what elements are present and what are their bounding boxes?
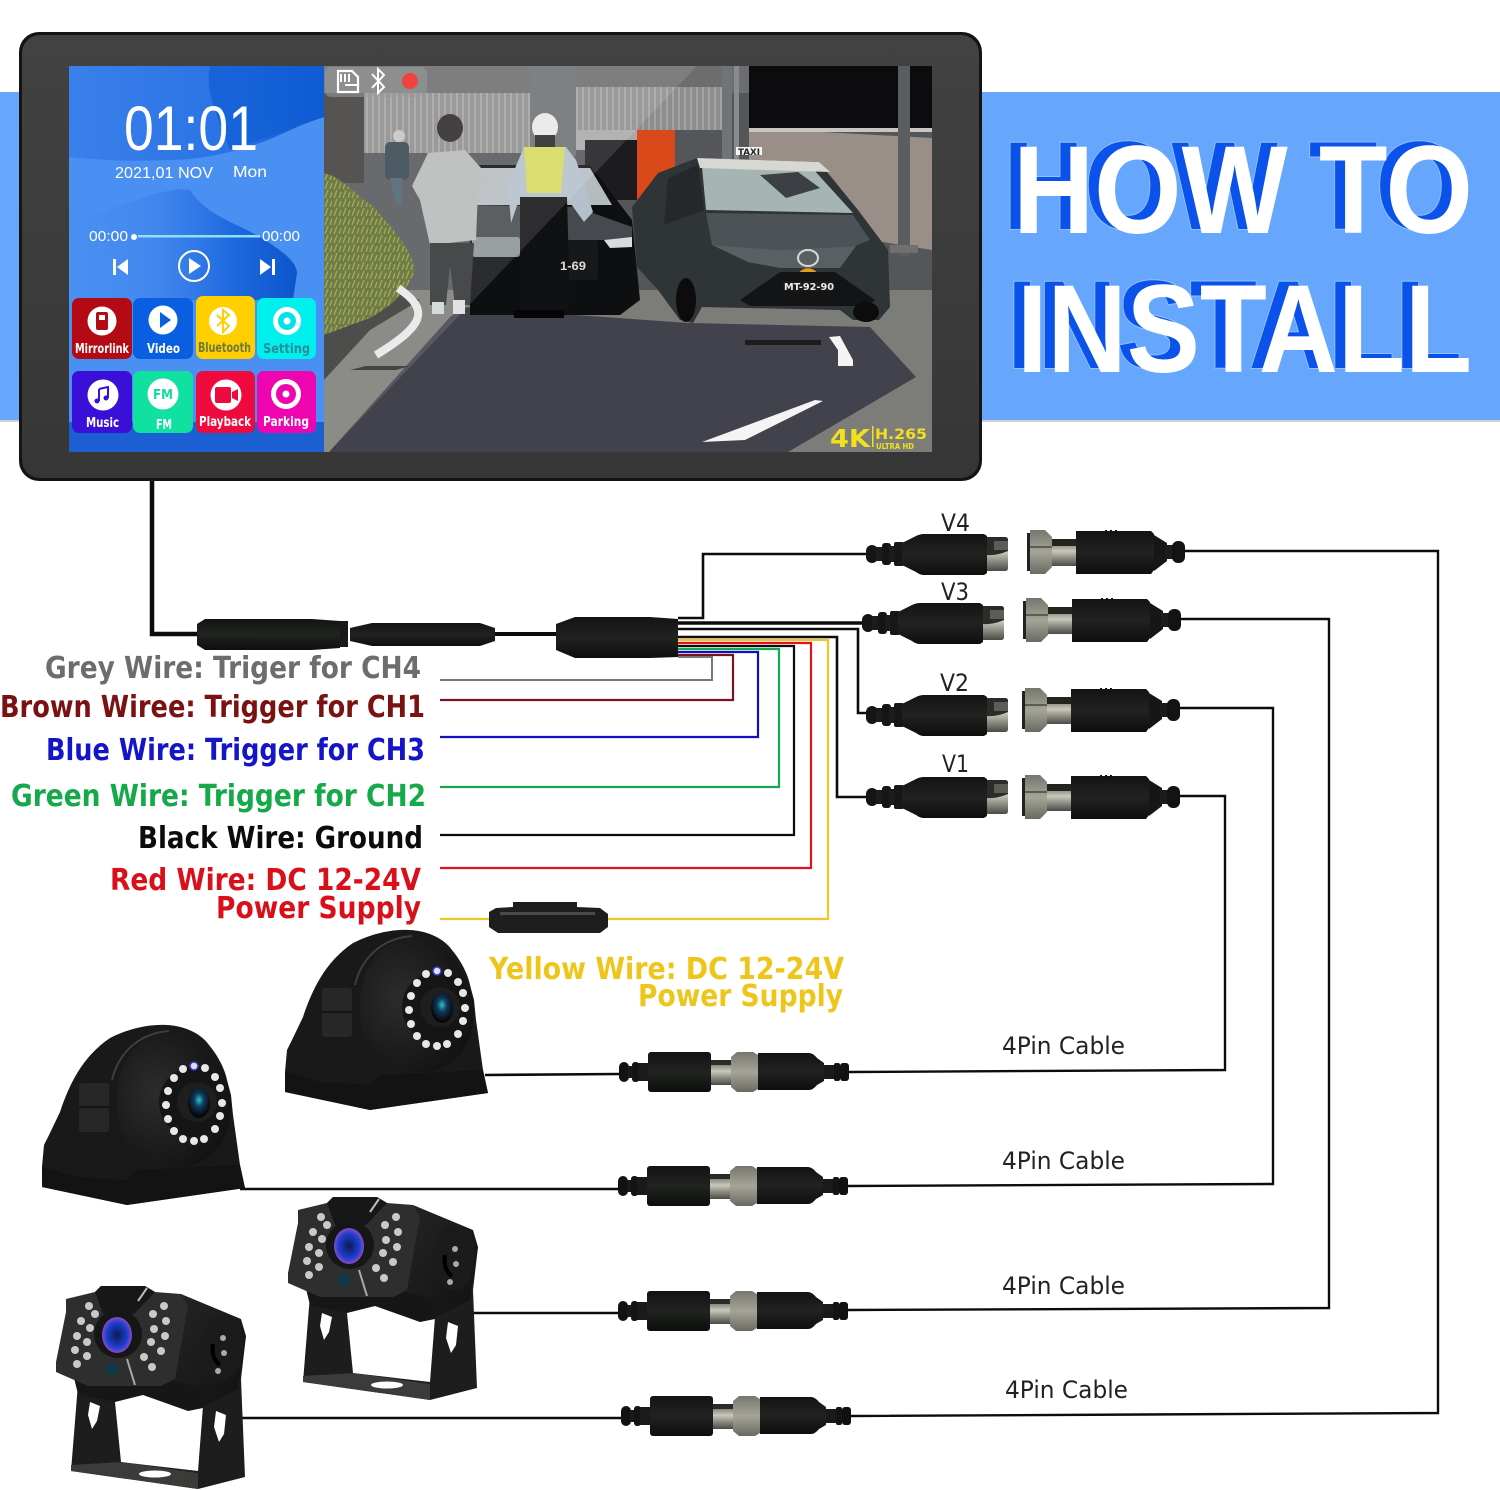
wire label: red: Power Supply xyxy=(216,891,421,926)
wire label: red: Red Wire: DC 12-24V xyxy=(110,863,422,898)
cable label 2: 4Pin Cable xyxy=(1002,1147,1125,1175)
app tile: Playback: Playback xyxy=(199,415,251,430)
media player controls: 00:00 xyxy=(262,228,300,245)
cable label 3: 4Pin Cable xyxy=(1002,1272,1125,1300)
app tile: Music: Music xyxy=(86,416,119,431)
cable label 4: 4Pin Cable xyxy=(1005,1376,1128,1404)
date: Mon xyxy=(233,164,267,181)
wire label: yellow xyxy=(488,952,845,1014)
app tile: Mirrorlink xyxy=(72,298,132,359)
wire label: yellow: Power Supply xyxy=(638,979,843,1014)
app tile: FM: FM xyxy=(156,418,172,433)
date: 2021,01 NOV xyxy=(115,165,214,182)
blue band xyxy=(0,92,1500,422)
connector pair V1 xyxy=(866,775,1180,819)
camera lead 2 xyxy=(240,1188,620,1190)
return wire V4 xyxy=(850,551,1438,1416)
date xyxy=(115,164,267,182)
left UI panel xyxy=(69,66,324,452)
app tile: Bluetooth: Bluetooth xyxy=(198,341,251,356)
app tile: Video xyxy=(133,298,193,359)
camera photo on screen xyxy=(324,66,932,452)
inline connector 3 xyxy=(618,1291,848,1331)
inline connector 4 xyxy=(621,1396,851,1436)
label V4: V4 xyxy=(941,509,970,537)
brown wire xyxy=(440,655,733,700)
camera photo on screen: MT-92-90 xyxy=(784,282,834,293)
4K H.265 badge: ULTRA HD xyxy=(876,442,914,451)
blue wire xyxy=(440,652,758,737)
box camera 2 xyxy=(56,1286,246,1489)
return wire V2 xyxy=(848,708,1273,1186)
camera lead 3 xyxy=(472,1312,620,1314)
red wire xyxy=(440,643,811,868)
4K H.265 badge: H.265 xyxy=(875,427,927,443)
dome camera 2 xyxy=(42,1025,245,1205)
app tile: Bluetooth xyxy=(196,296,255,359)
app tile: Parking: Parking xyxy=(263,415,309,430)
app tile: Music xyxy=(72,371,132,433)
grey wire xyxy=(440,657,712,680)
app tile: FM xyxy=(133,371,193,433)
title: how to install: HOW TO xyxy=(1003,117,1463,256)
wire label: green: Green Wire: Trigger for CH2 xyxy=(11,779,426,814)
main harness cable xyxy=(197,617,678,658)
title: how to install xyxy=(1003,117,1473,399)
app tile: Mirrorlink: Mirrorlink xyxy=(75,342,129,357)
app tile: FM: FM xyxy=(153,388,173,403)
wire label: yellow: Yellow Wire: DC 12-24V xyxy=(488,952,845,987)
4K H.265 badge xyxy=(830,424,927,453)
video wire V4 xyxy=(678,554,868,618)
black wire xyxy=(440,646,794,835)
4K H.265 badge: 4K xyxy=(830,424,872,453)
label V2: V2 xyxy=(940,669,969,697)
video wire V2 xyxy=(678,629,868,713)
return wire V1 xyxy=(848,796,1225,1072)
wire label: black: Black Wire: Ground xyxy=(138,821,423,856)
connector pair V2 xyxy=(866,688,1180,736)
monitor xyxy=(19,32,982,481)
camera lead 1 xyxy=(485,1074,620,1075)
inline connector 1 xyxy=(619,1052,849,1092)
wire label: blue: Blue Wire: Trigger for CH3 xyxy=(46,733,425,768)
camera photo on screen: 1-69 xyxy=(560,259,586,273)
wire label: grey: Grey Wire: Triger for CH4 xyxy=(45,651,421,686)
camera photo on screen: TAXI xyxy=(738,148,760,158)
connector pair V3 xyxy=(862,598,1181,644)
app tile: Parking xyxy=(257,371,316,433)
status bar icons xyxy=(325,67,427,97)
video wire V3 xyxy=(678,621,864,625)
wire label: brown: Brown Wiree: Trigger for CH1 xyxy=(0,690,425,725)
camera lead 4 xyxy=(240,1417,622,1419)
wire label: red xyxy=(110,863,422,926)
video wire V1 xyxy=(678,637,868,797)
yellow wire xyxy=(440,640,828,919)
inline connector 2 xyxy=(618,1166,848,1206)
app tile: Video: Video xyxy=(147,342,180,357)
clock: 01:01 xyxy=(124,94,258,164)
app tile: Setting xyxy=(257,298,316,359)
green wire xyxy=(440,649,779,787)
connector pair V4 xyxy=(866,530,1185,575)
fuse holder xyxy=(489,902,608,933)
label V3: V3 xyxy=(941,578,969,606)
return wire V3 xyxy=(848,619,1329,1310)
label V1: V1 xyxy=(942,750,969,778)
cable from monitor xyxy=(152,480,200,634)
dome camera 1 xyxy=(285,930,488,1110)
app tile: Playback xyxy=(196,371,255,433)
media player controls xyxy=(89,228,300,281)
box camera 1 xyxy=(288,1197,478,1400)
cable label 1: 4Pin Cable xyxy=(1002,1032,1125,1060)
media player controls: 00:00 xyxy=(89,228,128,245)
app tile: Setting: Setting xyxy=(263,342,310,357)
